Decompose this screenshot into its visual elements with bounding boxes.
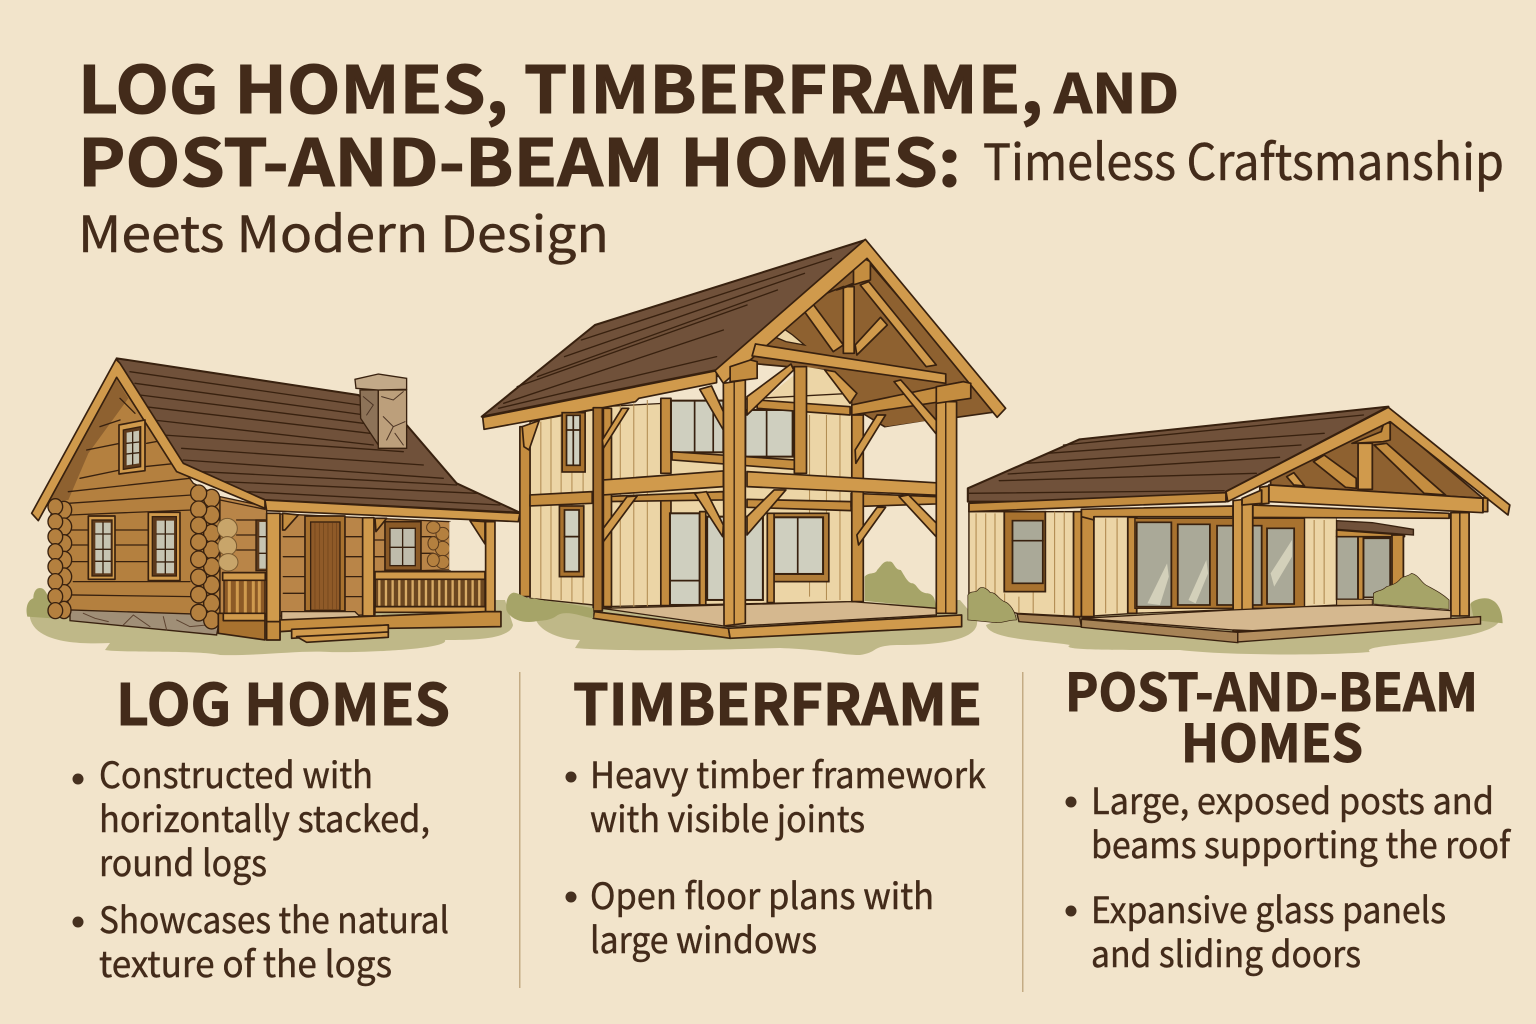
title: AND — [1053, 50, 1179, 129]
bullet list: timberframe: with visible joints — [590, 791, 865, 843]
bullet list: timberframe: Heavy timber framework — [590, 747, 986, 799]
attic window — [119, 420, 145, 474]
sill beams — [593, 612, 962, 638]
left window — [1004, 512, 1045, 592]
rear tie beam — [1253, 505, 1449, 518]
bullet list: timberframe: Open floor plans with — [590, 868, 934, 920]
gable struts — [1287, 422, 1446, 495]
bullet list: log homes: horizontally stacked, — [99, 791, 430, 843]
porch window — [385, 522, 421, 570]
roof — [117, 358, 520, 513]
upper windows — [661, 367, 850, 473]
ground under timberframe — [535, 600, 977, 655]
lower eave fascia — [483, 371, 717, 429]
right log ends — [427, 521, 450, 569]
sliding glass doors — [1135, 518, 1305, 608]
column: post-and-beam homes — [1065, 651, 1511, 978]
middle corner logs — [191, 485, 220, 629]
porch floor — [282, 612, 360, 622]
gable wall — [50, 377, 220, 617]
barge boards — [715, 239, 1006, 417]
bullet list: timberframe: large windows — [590, 912, 817, 964]
illustration: log home — [27, 358, 520, 642]
bargeboard — [32, 359, 265, 521]
heading: post-and-beam homes — [1065, 651, 1478, 777]
front wall — [602, 393, 852, 607]
right opening to sky — [864, 419, 936, 607]
bullet list: timberframe — [566, 747, 986, 964]
small side windows — [559, 413, 585, 577]
column: log homes — [72, 660, 450, 988]
bullet list: log homes: Showcases the natural — [99, 892, 449, 944]
main posts — [723, 360, 971, 626]
door — [305, 516, 345, 611]
second window — [148, 512, 180, 581]
front floor and sills — [1017, 605, 1481, 643]
barge boards — [1226, 407, 1510, 515]
title: Timeless Craftsmanship — [983, 123, 1504, 195]
bullet list: post-and-beam homes: and sliding doors — [1091, 926, 1361, 978]
left window — [88, 516, 115, 579]
illustration: timberframe home — [482, 239, 1006, 638]
wall posts — [1074, 512, 1137, 617]
illustration: post-and-beam home — [968, 407, 1510, 643]
ground under log home — [30, 600, 513, 655]
title — [78, 38, 1504, 267]
side wall — [530, 410, 593, 605]
bullet list: log homes — [72, 747, 449, 988]
narrow porch window — [256, 520, 267, 571]
braces — [522, 364, 945, 545]
lower windows and door — [661, 501, 829, 606]
divider — [1022, 672, 1024, 992]
stone foundation — [70, 610, 220, 635]
porch posts and brackets — [267, 513, 495, 640]
shrub at front left — [506, 593, 593, 622]
sky beyond wing — [1337, 513, 1453, 617]
chimney — [355, 374, 407, 448]
mid and lower wall beams — [530, 382, 963, 511]
title: Meets Modern Design — [78, 195, 609, 267]
left railing — [223, 573, 265, 613]
heading: post-and-beam homes: POST-AND-BEAM — [1065, 651, 1478, 726]
porch opening — [449, 522, 487, 570]
divider — [519, 672, 520, 988]
roof — [968, 407, 1388, 502]
bullet list: log homes: texture of the logs — [99, 936, 392, 988]
bullet list: log homes: round logs — [99, 835, 267, 887]
bush right of frame — [1471, 598, 1503, 623]
main posts — [1233, 490, 1469, 632]
bullet list: post-and-beam homes: Large, exposed posts and — [1091, 773, 1494, 825]
gable soffit — [1271, 420, 1483, 498]
light gap behind gable — [767, 367, 850, 413]
gable king post and struts — [774, 258, 936, 367]
roof — [482, 240, 865, 417]
bush in opening — [865, 561, 936, 608]
bullet list: log homes: Constructed with — [99, 747, 373, 799]
left walls — [969, 512, 1337, 617]
shrub left — [968, 587, 1016, 623]
ground under post-and-beam — [986, 600, 1501, 654]
column: timberframe — [566, 660, 986, 964]
lower soffit beam — [969, 493, 1233, 520]
bullet list: post-and-beam homes: beams supporting the roof — [1091, 817, 1511, 869]
left corner logs — [48, 499, 72, 619]
porch deck and steps — [218, 612, 501, 642]
shrub right — [1373, 573, 1449, 609]
porch eave beam — [265, 500, 520, 522]
heading: timberframe: TIMBERFRAME — [573, 660, 982, 742]
bush left — [27, 588, 51, 618]
gable soffit shadow — [40, 378, 128, 518]
rear wing — [1337, 521, 1413, 605]
light log ends — [217, 518, 238, 571]
main horizontal beams — [603, 471, 945, 496]
title: POST-AND-BEAM HOMES: — [78, 111, 961, 205]
main ridge beam — [1260, 485, 1488, 513]
porch back wall — [220, 497, 450, 617]
left wall post — [520, 427, 530, 597]
wall log courses — [68, 398, 192, 597]
soffit — [717, 258, 997, 427]
right railing — [375, 572, 486, 612]
bullet list: post-and-beam homes — [1066, 773, 1511, 978]
heading: log homes: LOG HOMES — [116, 660, 450, 742]
secondary posts — [593, 408, 863, 611]
bullet list: post-and-beam homes: Expansive glass panels — [1091, 882, 1446, 934]
collar beam — [752, 344, 946, 383]
floor slab — [602, 602, 936, 627]
title: LOG HOMES, TIMBERFRAME, — [78, 38, 1043, 132]
heading: post-and-beam homes: HOMES — [1181, 702, 1363, 777]
